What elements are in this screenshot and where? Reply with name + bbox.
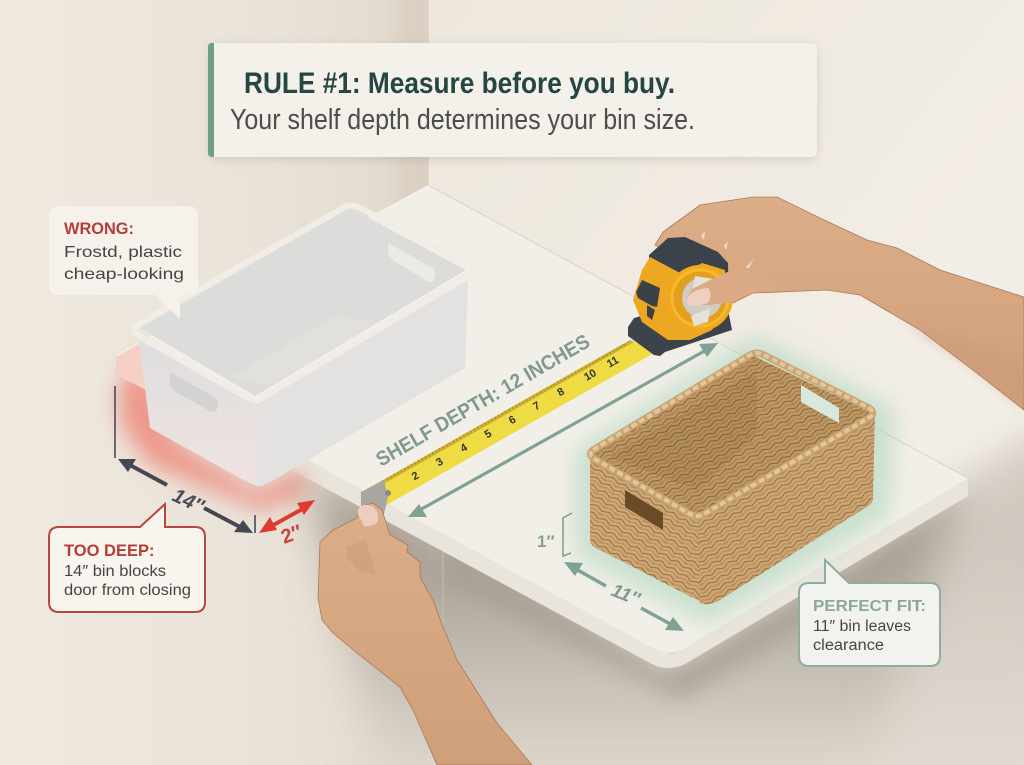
tape blade: 3 — [434, 456, 445, 469]
2 inch red overage — [259, 500, 315, 549]
perfect fit callout: clearance — [813, 637, 884, 654]
bin back handle — [388, 244, 435, 282]
tape blade — [360, 340, 656, 523]
tape blade: 8 — [555, 386, 567, 399]
too deep callout: TOO DEEP: — [64, 542, 154, 560]
tape blade: 2 — [410, 470, 421, 483]
14 inch dimension: 14″ — [169, 485, 208, 519]
red glow under wrong bin — [118, 350, 310, 510]
14 inch dimension — [115, 386, 255, 533]
1 inch dimension: 1″ — [537, 532, 555, 551]
2 inch red overage: 2″ — [278, 521, 306, 549]
tape measure — [628, 237, 733, 356]
tape blade: 10 — [582, 367, 599, 384]
title panel: RULE #1: Measure before you buy. — [244, 67, 675, 100]
perfect fit callout: PERFECT FIT: — [813, 598, 926, 615]
thumb on tape measure — [687, 267, 777, 306]
perfect fit callout: 11″ bin leaves — [813, 618, 911, 635]
1 inch dimension — [537, 513, 572, 556]
too deep callout: 14″ bin blocks — [64, 563, 166, 580]
basket — [590, 353, 875, 605]
tape blade: 7 — [531, 400, 542, 413]
shelf — [115, 185, 968, 668]
11 inch dimension: 11″ — [608, 580, 644, 611]
shelf depth label: SHELF DEPTH: 12 INCHES — [372, 330, 594, 471]
bin front handle — [170, 373, 218, 412]
tape blade: 5 — [483, 428, 494, 441]
title panel: Your shelf depth determines your bin size. — [230, 104, 695, 136]
wrong callout — [49, 206, 198, 319]
wrong callout: Frostd, plastic — [64, 244, 182, 261]
title panel — [208, 43, 817, 159]
tape blade: 4 — [458, 441, 470, 455]
too deep callout — [49, 504, 205, 612]
hand holding tape clip — [318, 503, 532, 765]
too deep callout: door from closing — [64, 582, 191, 599]
shelf depth arrow — [408, 343, 718, 517]
tape blade: 6 — [507, 414, 518, 427]
perfect fit callout — [799, 560, 940, 666]
green glow around basket — [575, 335, 895, 625]
pink shelf end — [116, 342, 150, 392]
tape blade: 11 — [605, 354, 621, 371]
11 inch dimension — [564, 562, 684, 631]
wrong callout: cheap-looking — [64, 266, 184, 283]
wrong callout: WRONG: — [64, 220, 134, 238]
hand holding tape measure — [655, 197, 1024, 410]
wrong plastic bin — [135, 206, 472, 486]
